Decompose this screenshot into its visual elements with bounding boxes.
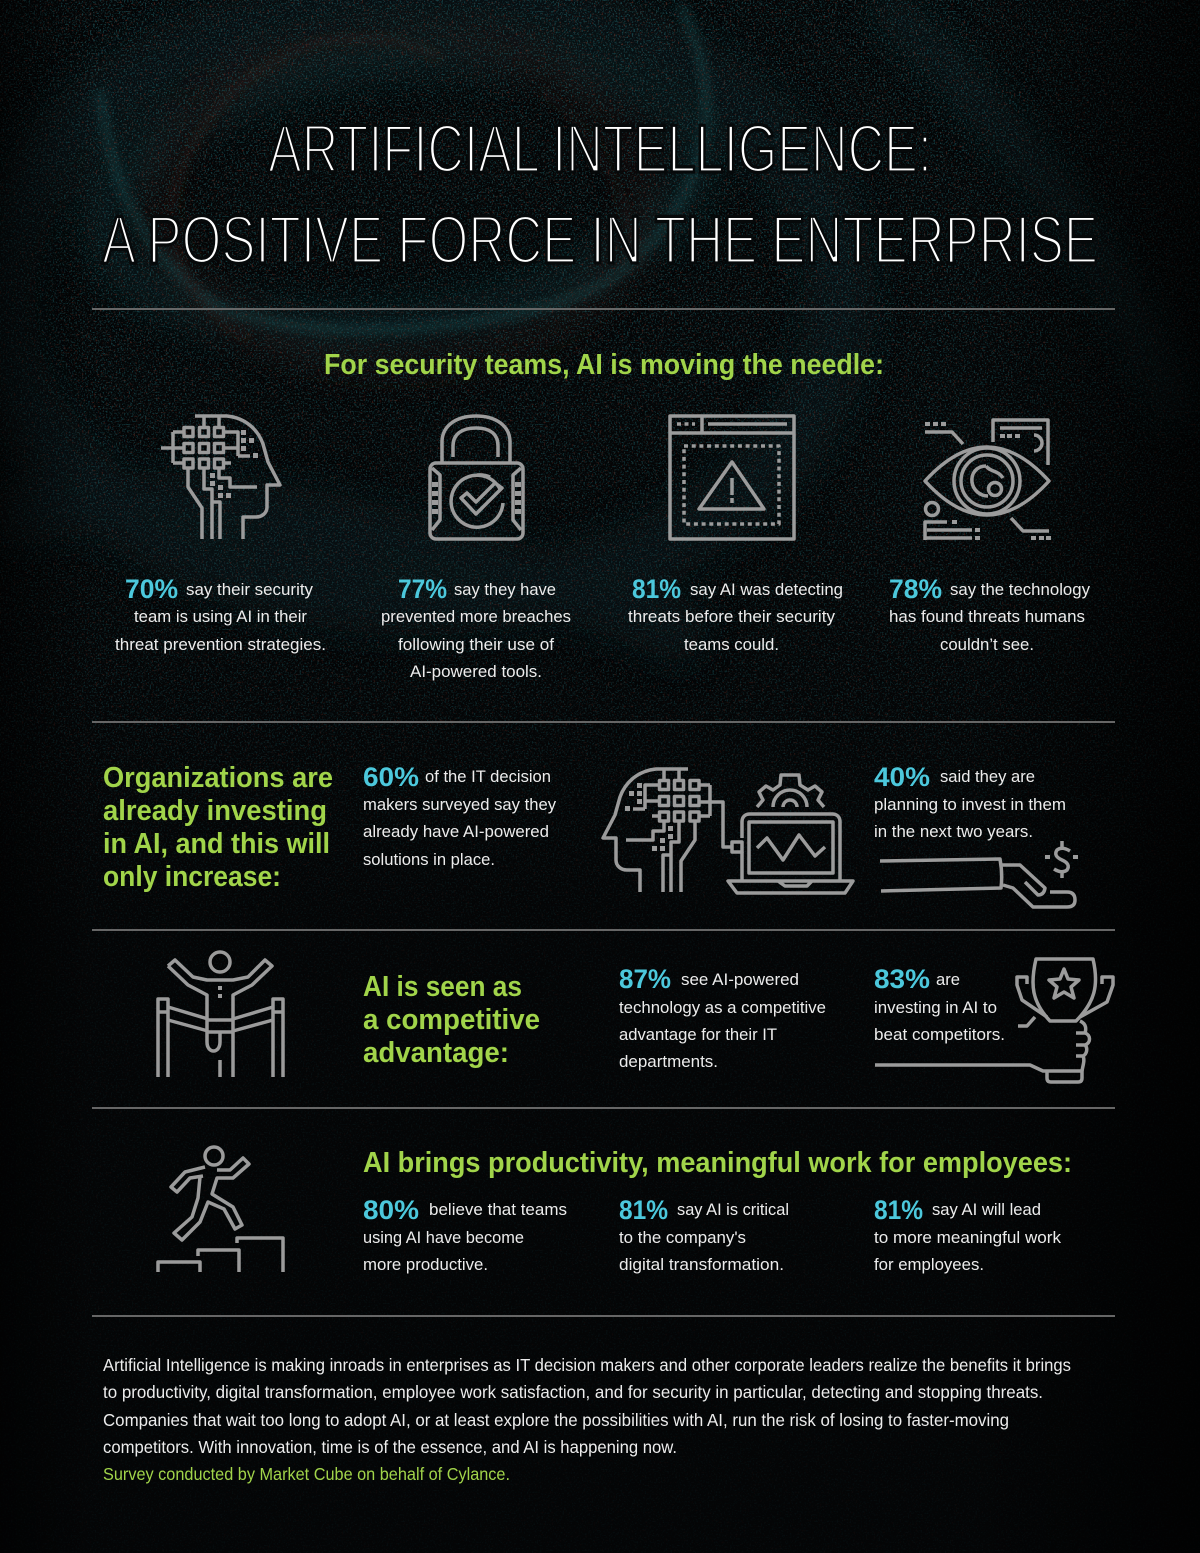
stat: 81% detecting: threats before their security [628,607,836,626]
stat: 77%: AI-powered tools. [410,662,542,681]
stat: 60%: already have AI-powered [363,822,549,841]
stat: 83%: beat competitors. [874,1025,1005,1044]
stat: 60%: solutions in place. [363,850,495,869]
stat: 81% detecting: teams could. [684,635,779,654]
stat: 77%: prevented more breaches [381,607,571,626]
icon: hand holding trophy [875,959,1113,1082]
stat: 81% critical [619,1195,789,1274]
heading: organizations investing: Organizations are [103,762,333,794]
heading: security teams: For security teams, AI is moving the needle: [324,349,884,381]
stat: 78% [889,574,1090,654]
stat: 80%: 80% [363,1195,419,1225]
footer paragraph: competitors. With innovation, time is of the essence, and AI is happening now. [103,1437,677,1457]
stat: 60% [363,762,556,869]
stat: 78%: couldn’t see. [940,635,1034,654]
icon: browser warning [670,416,794,539]
stat: 87%: departments. [619,1052,718,1071]
stat: 81% detecting: 81% [632,574,681,604]
icon: runner crossing finish line [158,952,283,1077]
stat: 77%: following their use of [398,635,554,654]
heading: organizations investing: only increase: [103,861,281,893]
heading: productivity: AI brings productivity, meaningful work for employees: [363,1147,1072,1179]
stat: 70%: threat prevention strategies. [115,635,326,654]
stat: 81% detecting [628,574,843,654]
heading: organizations investing: already investing [103,795,327,827]
stat: 77%: say they have [454,580,556,599]
stat: 81% detecting: say AI was detecting [690,580,843,599]
stat: 77% [381,574,571,681]
stat: 70%: team is using AI in their [134,607,307,626]
footer paragraph: to productivity, digital transformation, employee work satisfaction, and for security in particular, detecting and stopping threats. [103,1382,1043,1402]
stat: 83%: investing in AI to [874,998,997,1017]
stat: 80%: more productive. [363,1255,488,1274]
icon: hand with dollar [880,841,1078,907]
stat: 81% meaningful: for employees. [874,1255,984,1274]
icon: head connected to laptop [603,769,853,893]
heading: organizations investing: in AI, and this will [103,828,330,860]
stat: 40%: in the next two years. [874,822,1033,841]
stat: 87% [619,964,826,1071]
stat: 81% critical: 81% [619,1195,668,1225]
stat: 60%: makers surveyed say they [363,795,556,814]
stat: 77%: 77% [398,574,447,604]
survey credit: Survey conducted by Market Cube on behalf of Cylance. [103,1464,510,1484]
stat: 87%: technology as a competitive [619,998,826,1017]
stat: 78%: 78% [889,574,942,604]
stat: 81% critical: to the company's [619,1228,746,1247]
stat: 83%: 83% [874,964,930,994]
stat: 80%: using AI have become [363,1228,524,1247]
heading: competitive advantage [363,971,540,1069]
stat: 78%: has found threats humans [889,607,1085,626]
stat: 40%: planning to invest in them [874,795,1066,814]
stat: 40%: 40% [874,762,930,792]
stat: 40%: said they are [940,767,1035,786]
stat: 83%: are [936,970,960,989]
stat: 81% meaningful [874,1195,1061,1274]
footer paragraph: Artificial Intelligence is making inroads in enterprises as IT decision makers and other corporate leaders realize the benefits it brings [103,1355,1071,1375]
stat: 87%: advantage for their IT [619,1025,777,1044]
stat: 60%: of the IT decision [425,767,551,786]
icon: AI head [161,416,280,539]
stat: 60%: 60% [363,762,419,792]
footer paragraph: Companies that wait too long to adopt AI, or at least explore the possibilities with AI, run the risk of losing to faster-moving [103,1410,1009,1430]
stat: 83% [874,964,1005,1044]
stat: 81% meaningful: 81% [874,1195,923,1225]
stat: 70% [115,574,326,654]
heading: competitive advantage: AI is seen as [363,971,522,1003]
stat: 87%: 87% [619,964,671,994]
stat: 40% [874,762,1066,841]
icon: eye scan [925,420,1051,540]
stat: 80%: believe that teams [429,1200,567,1219]
stat: 80% [363,1195,567,1274]
stat: 81% critical: digital transformation. [619,1255,784,1274]
title: ARTIFICIAL INTELLIGENCE: [268,111,932,187]
icon: padlock [430,416,523,539]
stat: 70%: say their security [186,580,313,599]
title [102,111,1098,278]
icon: figure climbing steps [158,1147,283,1272]
stat: 87%: see AI-powered [681,970,799,989]
heading: organizations investing [103,762,333,893]
heading: competitive advantage: a competitive [363,1004,540,1036]
footer paragraph [103,1355,1071,1457]
stat: 81% meaningful: say AI will lead [932,1200,1041,1219]
heading: competitive advantage: advantage: [363,1037,509,1069]
stat: 70%: 70% [125,574,178,604]
stat: 81% critical: say AI is critical [677,1200,789,1219]
stat: 78%: say the technology [950,580,1090,599]
stat: 81% meaningful: to more meaningful work [874,1228,1061,1247]
